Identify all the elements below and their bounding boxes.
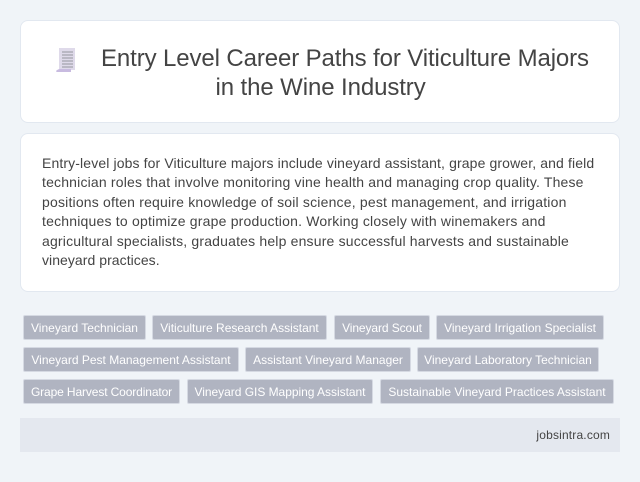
tag [245,347,411,372]
tag [436,315,604,340]
tag: Vineyard Technician [31,321,138,335]
tag list [23,315,614,404]
tag: Viticulture Research Assistant [160,321,319,335]
tag [23,379,180,404]
tag [23,347,239,372]
tag: Grape Harvest Coordinator [31,385,172,399]
title: Entry Level Career Paths for Viticulture Majors [101,45,589,72]
tag: Sustainable Vineyard Practices Assistant [388,385,606,399]
tag [380,379,614,404]
description text: vineyard practices. [42,252,160,268]
tag [334,315,430,340]
title [101,45,589,101]
icon: document scroll [56,48,75,72]
tag: Vineyard Pest Management Assistant [31,353,231,367]
tag: Assistant Vineyard Manager [253,353,403,367]
title: in the Wine Industry [216,74,426,101]
footer [20,418,620,452]
tag: Vineyard Scout [342,321,422,335]
tag [152,315,327,340]
tag: Vineyard GIS Mapping Assistant [194,385,365,399]
description text: agricultural specialists, graduates help ensure successful harvests and sustainable [42,233,569,249]
tag: Vineyard Laboratory Technician [424,353,592,367]
description text: technician roles that involve monitoring vine health and managing crop quality. These [42,174,584,190]
tag [187,379,373,404]
description text: techniques to optimize grape production. Working closely with winemakers and [42,213,546,229]
tag [23,315,146,340]
description text: positions often require knowledge of soil science, pest management, and irrigation [42,194,567,210]
footer source text: jobsintra.com [536,428,610,442]
description text: Entry-level jobs for Viticulture majors include vineyard assistant, grape grower, and field [42,155,594,171]
panel: description [20,133,620,292]
panel: header [20,20,620,123]
tag [417,347,599,372]
description text [42,155,594,268]
tag: Vineyard Irrigation Specialist [444,321,596,335]
